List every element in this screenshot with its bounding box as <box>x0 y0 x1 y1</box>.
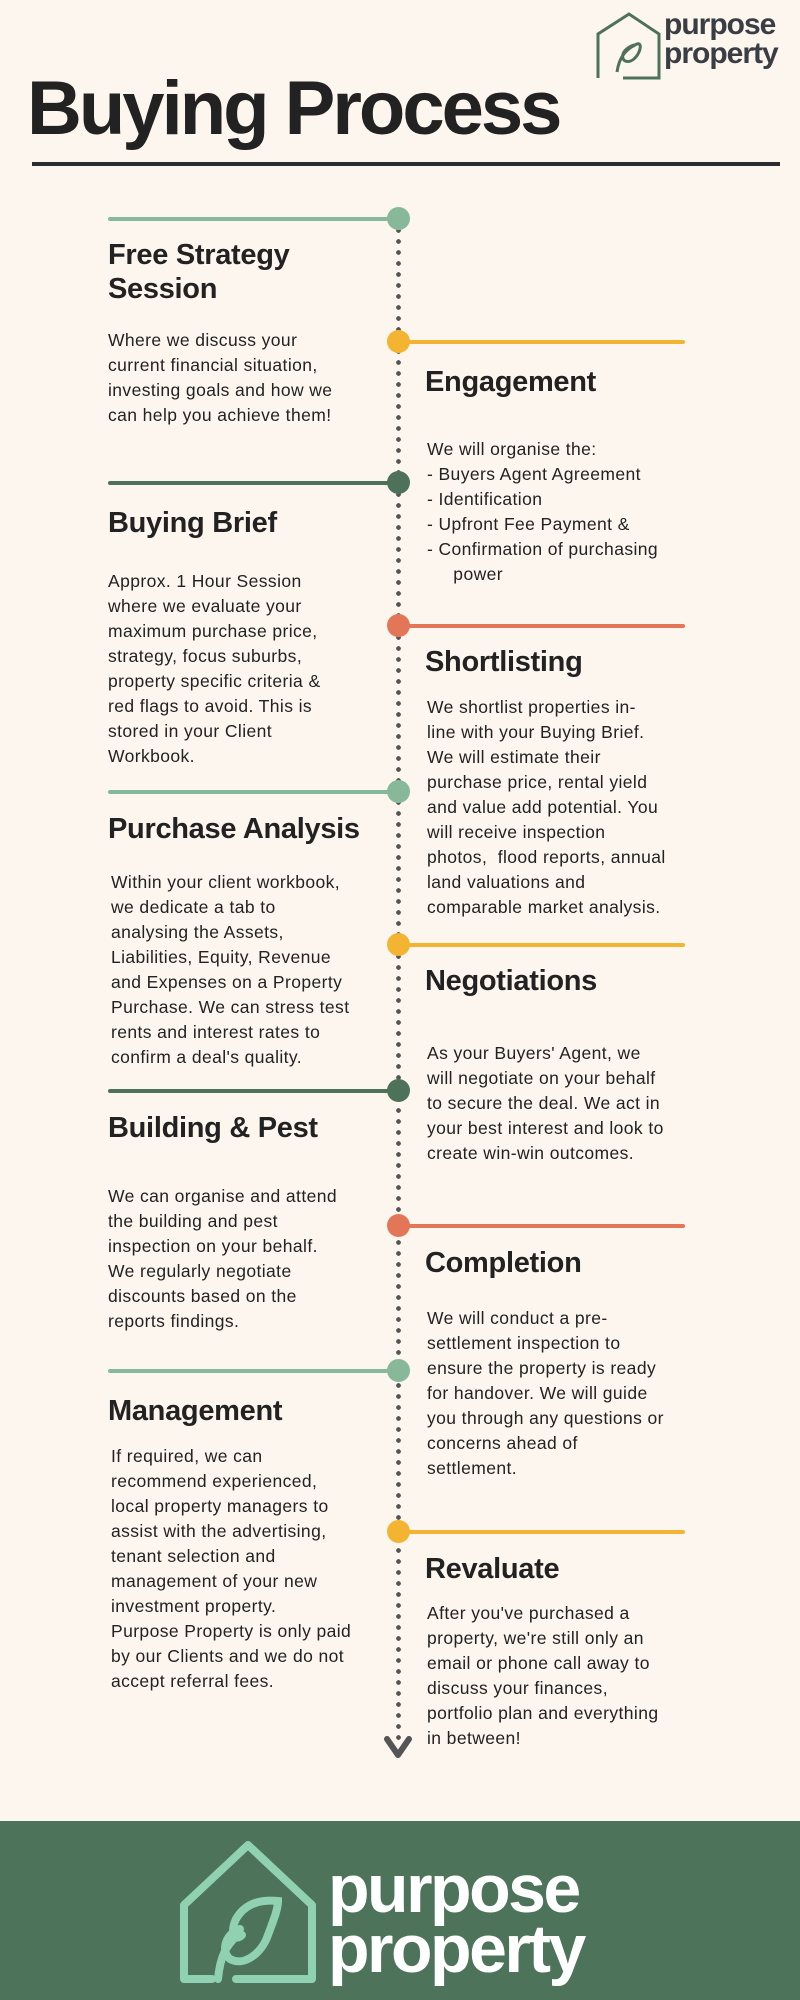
step 9: Management: assist with the advertising, <box>111 1521 326 1541</box>
step 6: Negotiations: Negotiations <box>425 965 597 997</box>
step 1: Free Strategy Session: can help you achieve them! <box>108 405 331 425</box>
step 8: Completion: We will conduct a pre- <box>427 1308 608 1328</box>
step 4: Shortlisting <box>387 614 685 917</box>
step 4: Shortlisting: purchase price, rental yield <box>427 772 647 792</box>
step 2: Engagement <box>387 330 685 584</box>
step 9: Management: Purpose Property is only paid <box>111 1621 351 1641</box>
arrow <box>384 1736 412 1758</box>
step 5: Purchase Analysis: we dedicate a tab to <box>111 897 276 917</box>
step 9: Management: tenant selection and <box>111 1546 276 1566</box>
step 5: Purchase Analysis: confirm a deal's quality. <box>111 1047 302 1067</box>
step 5: Purchase Analysis: Purchase Analysis <box>108 813 360 845</box>
step 1: Free Strategy Session: investing goals and how we <box>108 380 332 400</box>
step 3: Buying Brief: Workbook. <box>108 746 195 766</box>
title: Buying Process <box>27 66 559 151</box>
step 7: Building & Pest: We can organise and attend <box>108 1186 337 1206</box>
step 1: Free Strategy Session: Where we discuss your <box>108 330 297 350</box>
logo: top right: purpose <box>664 8 775 41</box>
step 6: Negotiations: create win-win outcomes. <box>427 1143 634 1163</box>
step 9: Management: If required, we can <box>111 1446 263 1466</box>
step 4: Shortlisting: comparable market analysis. <box>427 897 661 917</box>
step 6: Negotiations: As your Buyers' Agent, we <box>427 1043 641 1063</box>
step 5: Purchase Analysis <box>108 780 410 1067</box>
step 4: Shortlisting: will receive inspection <box>427 822 605 842</box>
step 6: Negotiations: will negotiate on your behalf <box>427 1068 656 1088</box>
step 4: Shortlisting: and value add potential. You <box>427 797 658 817</box>
step 4: Shortlisting: We will estimate their <box>427 747 601 767</box>
step 3: Buying Brief: Buying Brief <box>108 507 277 539</box>
timeline: dotted line <box>396 225 401 1740</box>
step 5: Purchase Analysis: and Expenses on a Property <box>111 972 342 992</box>
step 8: Completion: Completion <box>425 1247 582 1279</box>
step 4: Shortlisting: line with your Buying Brief. <box>427 722 644 742</box>
logo: top right: property <box>664 37 778 70</box>
step 2: Engagement: - Upfront Fee Payment & <box>427 514 630 534</box>
step 3: Buying Brief <box>108 471 410 766</box>
footer <box>0 1821 800 2000</box>
step 8: Completion: settlement inspection to <box>427 1333 620 1353</box>
step 3: Buying Brief: Approx. 1 Hour Session <box>108 571 302 591</box>
step 2: Engagement: - Buyers Agent Agreement <box>427 464 641 484</box>
step 6: Negotiations <box>387 933 685 1163</box>
step 5: Purchase Analysis: Purchase. We can stress test <box>111 997 349 1017</box>
step 8: Completion: you through any questions or <box>427 1408 664 1428</box>
logo: top right <box>596 8 778 80</box>
step 3: Buying Brief: stored in your Client <box>108 721 272 741</box>
step 8: Completion: settlement. <box>427 1458 517 1478</box>
step 7: Building & Pest: We regularly negotiate <box>108 1261 292 1281</box>
step 5: Purchase Analysis: analysing the Assets, <box>111 922 284 942</box>
step 5: Purchase Analysis: rents and interest rates to <box>111 1022 320 1042</box>
step 10: Revaluate: email or phone call away to <box>427 1653 650 1673</box>
step 10: Revaluate: in between! <box>427 1728 521 1748</box>
step 9: Management: management of your new <box>111 1571 317 1591</box>
step 7: Building & Pest <box>108 1079 410 1331</box>
step 3: Buying Brief: strategy, focus suburbs, <box>108 646 302 666</box>
step 2: Engagement: - Confirmation of purchasing <box>427 539 658 559</box>
step 2: Engagement: power <box>453 564 503 584</box>
step 7: Building & Pest: the building and pest <box>108 1211 278 1231</box>
step 1: Free Strategy Session: Session <box>108 273 217 305</box>
step 8: Completion: for handover. We will guide <box>427 1383 648 1403</box>
step 9: Management: by our Clients and we do not <box>111 1646 344 1666</box>
footer logo: purpose <box>328 1851 579 1927</box>
step 4: Shortlisting: We shortlist properties in- <box>427 697 636 717</box>
step 9: Management: Management <box>108 1395 282 1427</box>
footer logo: property <box>328 1911 584 1987</box>
step 4: Shortlisting: land valuations and <box>427 872 585 892</box>
step 9: Management: investment property. <box>111 1596 276 1616</box>
step 9: Management: accept referral fees. <box>111 1671 274 1691</box>
step 9: Management: recommend experienced, <box>111 1471 317 1491</box>
step 10: Revaluate: discuss your finances, <box>427 1678 608 1698</box>
step 3: Buying Brief: maximum purchase price, <box>108 621 318 641</box>
step 10: Revaluate: portfolio plan and everything <box>427 1703 658 1723</box>
step 2: Engagement: We will organise the: <box>427 439 597 459</box>
step 5: Purchase Analysis: Within your client workbook, <box>111 872 340 892</box>
step 9: Management: local property managers to <box>111 1496 329 1516</box>
step 6: Negotiations: your best interest and look to <box>427 1118 664 1138</box>
step 7: Building & Pest: discounts based on the <box>108 1286 297 1306</box>
step 8: Completion: concerns ahead of <box>427 1433 578 1453</box>
step 3: Buying Brief: property specific criteria & <box>108 671 321 691</box>
step 6: Negotiations: to secure the deal. We act in <box>427 1093 660 1113</box>
step 7: Building & Pest: reports findings. <box>108 1311 239 1331</box>
step 4: Shortlisting: Shortlisting <box>425 646 583 678</box>
step 7: Building & Pest: Building & Pest <box>108 1112 318 1144</box>
step 1: Free Strategy Session: current financial situation, <box>108 355 318 375</box>
step 10: Revaluate: After you've purchased a <box>427 1603 630 1623</box>
footer logo <box>180 1841 586 1987</box>
step 10: Revaluate <box>387 1520 685 1748</box>
step 10: Revaluate: Revaluate <box>425 1553 559 1585</box>
step 3: Buying Brief: red flags to avoid. This is <box>108 696 312 716</box>
step 7: Building & Pest: inspection on your behalf. <box>108 1236 318 1256</box>
step 1: Free Strategy Session: Free Strategy <box>108 239 289 271</box>
step 4: Shortlisting: photos, flood reports, annual <box>427 847 666 867</box>
step 8: Completion: ensure the property is ready <box>427 1358 656 1378</box>
step 10: Revaluate: property, we're still only an <box>427 1628 644 1648</box>
step 9: Management <box>108 1359 410 1691</box>
step 1: Free Strategy Session <box>108 207 410 425</box>
step 2: Engagement: - Identification <box>427 489 542 509</box>
step 2: Engagement: Engagement <box>425 366 596 398</box>
step 5: Purchase Analysis: Liabilities, Equity, Revenue <box>111 947 331 967</box>
step 8: Completion <box>387 1214 685 1478</box>
step 3: Buying Brief: where we evaluate your <box>108 596 302 616</box>
